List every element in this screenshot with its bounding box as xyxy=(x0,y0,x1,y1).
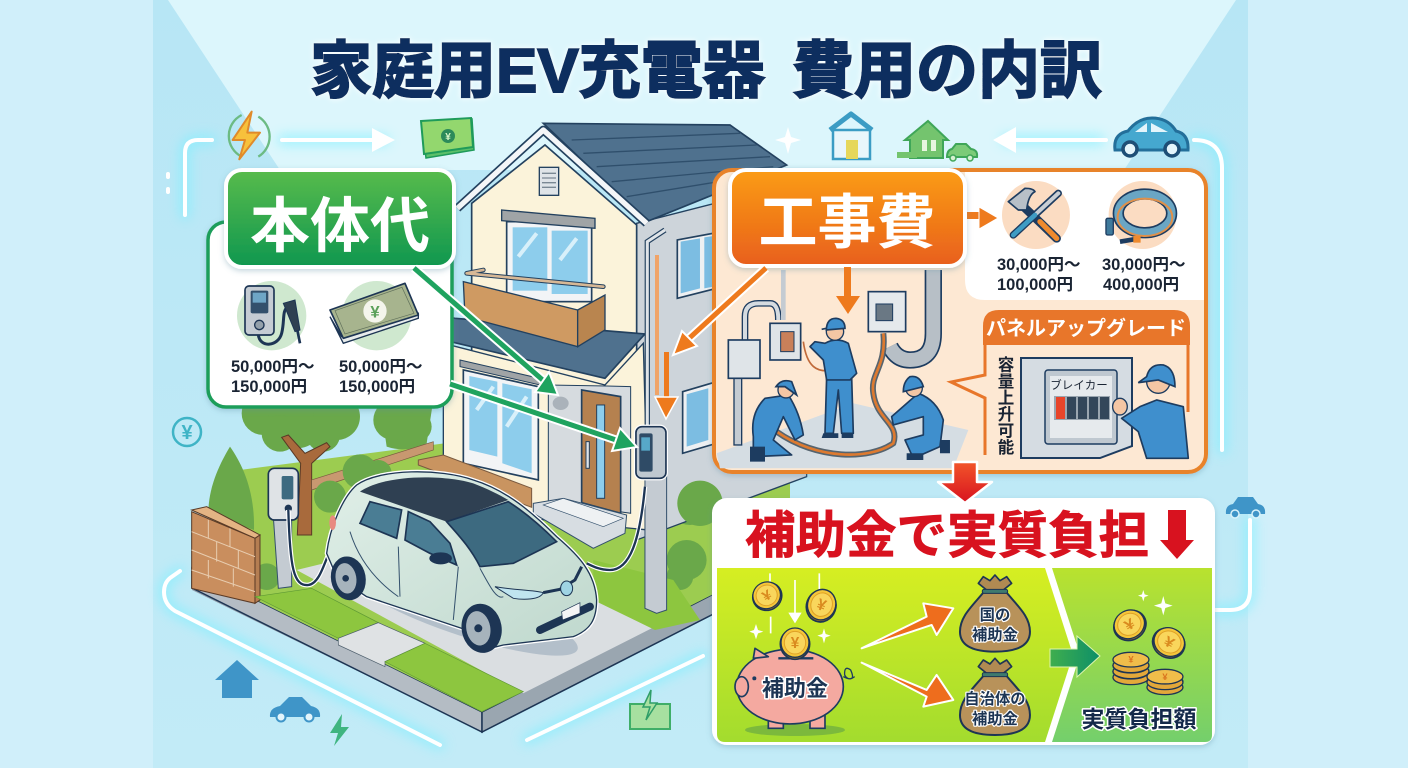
price: bills: 50,000円〜 xyxy=(339,358,422,376)
breaker box xyxy=(1021,358,1132,458)
falling coins: ¥ xyxy=(760,587,775,605)
panel body xyxy=(208,222,452,407)
title: 家庭用EV充電器 xyxy=(310,20,765,110)
money bag: national subsidy: 補助金 xyxy=(972,623,1019,645)
arrow: to net cost xyxy=(1050,636,1100,677)
electric car xyxy=(327,472,597,672)
white cost area xyxy=(965,172,1204,300)
breaker box: ブレイカー xyxy=(1050,377,1108,393)
side bush xyxy=(677,481,723,526)
price: bills: 150,000円 xyxy=(339,378,415,396)
panel body xyxy=(712,498,1215,745)
arrows: green to house and charger xyxy=(414,268,637,451)
icon: banknotes: ¥ xyxy=(445,132,451,143)
arrow: to work scene xyxy=(836,267,860,314)
EV charger: left post xyxy=(268,468,340,588)
icon: small car right xyxy=(1226,497,1265,518)
price: charger: 150,000円 xyxy=(231,378,307,396)
capacity note: 容量上升可能 xyxy=(994,355,1018,455)
piggy bank: ¥ xyxy=(791,635,800,652)
sub-panel: panel upgrade xyxy=(951,310,1190,458)
icon: yen circle xyxy=(173,418,201,446)
arrow: orange diagonal to wall xyxy=(673,268,766,355)
falling coins xyxy=(747,577,841,626)
icon: lightning badge xyxy=(229,112,270,159)
heading: 工事費: 工事費 xyxy=(758,175,936,260)
icon: green house with car xyxy=(897,121,977,161)
heading: 工事費 xyxy=(730,170,965,266)
panel: 補助金 xyxy=(712,494,1215,745)
panel body xyxy=(714,170,1206,472)
house xyxy=(443,123,807,540)
money bag: municipal subsidy xyxy=(960,658,1030,735)
upstairs window xyxy=(507,222,592,302)
coins: net cost: ¥ xyxy=(1122,616,1138,634)
vent xyxy=(539,167,559,195)
sub-panel: panel upgrade: パネルアップグレード xyxy=(986,312,1186,341)
gable trim xyxy=(457,130,647,223)
price: tools: 30,000円〜 xyxy=(997,256,1080,274)
icon: tools xyxy=(1002,181,1070,249)
money bag: national subsidy: 国の xyxy=(980,603,1010,625)
icon: house bottom left xyxy=(215,660,259,698)
icon: sparkle xyxy=(775,127,801,154)
icon: blue house xyxy=(830,114,872,159)
price: charger: 50,000円〜 xyxy=(231,358,314,376)
icon: banknotes xyxy=(421,118,474,158)
porch lamp xyxy=(553,397,569,410)
piggy bank: 補助金 xyxy=(762,671,828,703)
title: 費用の内訳 xyxy=(792,20,1102,110)
upper gable wall xyxy=(472,145,637,387)
heading: 本体代: 本体代 xyxy=(250,178,430,265)
net cost label: 実質負担額 xyxy=(1082,700,1196,734)
gutter xyxy=(647,230,665,427)
EV charger: wall post xyxy=(587,427,667,613)
side wall xyxy=(637,180,807,540)
worker standing xyxy=(810,318,857,438)
price: cable: 400,000円 xyxy=(1103,276,1179,294)
glowing circuit frame xyxy=(164,127,1250,745)
icon: yen circle: ¥ xyxy=(181,422,193,444)
icon: car bottom left xyxy=(270,697,320,722)
icon: battery bolt xyxy=(630,690,670,729)
heading: subsidy: 補助金で実質負担 xyxy=(745,494,1149,568)
arrows: split to subsidies xyxy=(862,603,953,707)
money bag: municipal subsidy: 自治体の xyxy=(964,687,1026,709)
money bag: national subsidy xyxy=(960,575,1030,652)
side windows xyxy=(677,233,717,298)
brick wall xyxy=(192,507,260,603)
icon: yen bills: ¥ xyxy=(370,302,380,321)
arrows: orange to wall xyxy=(655,255,678,419)
worker kneeling right xyxy=(892,376,950,460)
deck and steps xyxy=(418,455,627,548)
worker at breaker xyxy=(1113,365,1188,458)
panel: 工事費 xyxy=(714,170,1206,472)
lower wall xyxy=(443,343,648,530)
coins: net cost xyxy=(1108,590,1190,695)
green bands xyxy=(717,568,1212,742)
piggy bank xyxy=(735,573,855,736)
icon: blue car xyxy=(1115,118,1188,156)
lower roof xyxy=(443,317,645,378)
arrow: red down xyxy=(938,462,992,503)
balcony xyxy=(467,270,603,287)
lower window xyxy=(463,370,538,480)
coins: net cost: ¥ xyxy=(1161,634,1177,652)
icon: yen bills xyxy=(330,281,418,350)
icon: cable coil xyxy=(1106,181,1177,249)
panel: 本体代 xyxy=(208,170,454,407)
price: tools: 100,000円 xyxy=(997,276,1073,294)
ground platform xyxy=(192,440,790,732)
arrow: to costs xyxy=(962,207,998,229)
icon: wall charger xyxy=(237,281,306,350)
main roof xyxy=(543,123,787,222)
coins: net cost: ¥ xyxy=(1128,655,1134,665)
door xyxy=(582,390,621,513)
driveway and lawn strips xyxy=(255,533,700,712)
coins: net cost: ¥ xyxy=(1162,672,1168,682)
icon: bolt xyxy=(330,714,349,746)
money bag: municipal subsidy: 補助金 xyxy=(972,707,1019,729)
worker kneeling left xyxy=(750,381,803,462)
falling coins: ¥ xyxy=(814,596,829,615)
installation scene xyxy=(717,270,968,468)
price: cable: 30,000円〜 xyxy=(1102,256,1185,274)
tree and shrubs xyxy=(208,392,712,590)
